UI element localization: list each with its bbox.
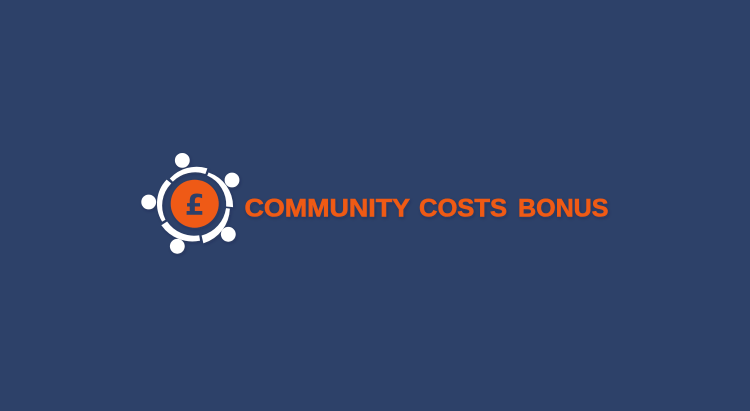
icon: orange coin <box>171 180 219 228</box>
title <box>244 195 608 223</box>
title: COMMUNITY <box>244 195 410 223</box>
icon: pound sign: £ <box>185 189 205 222</box>
title: BONUS <box>518 195 608 223</box>
icon: ring segments <box>157 167 233 243</box>
title: COSTS <box>419 195 507 223</box>
logo: community pound icon <box>141 153 239 254</box>
icon: people dots <box>141 153 239 254</box>
